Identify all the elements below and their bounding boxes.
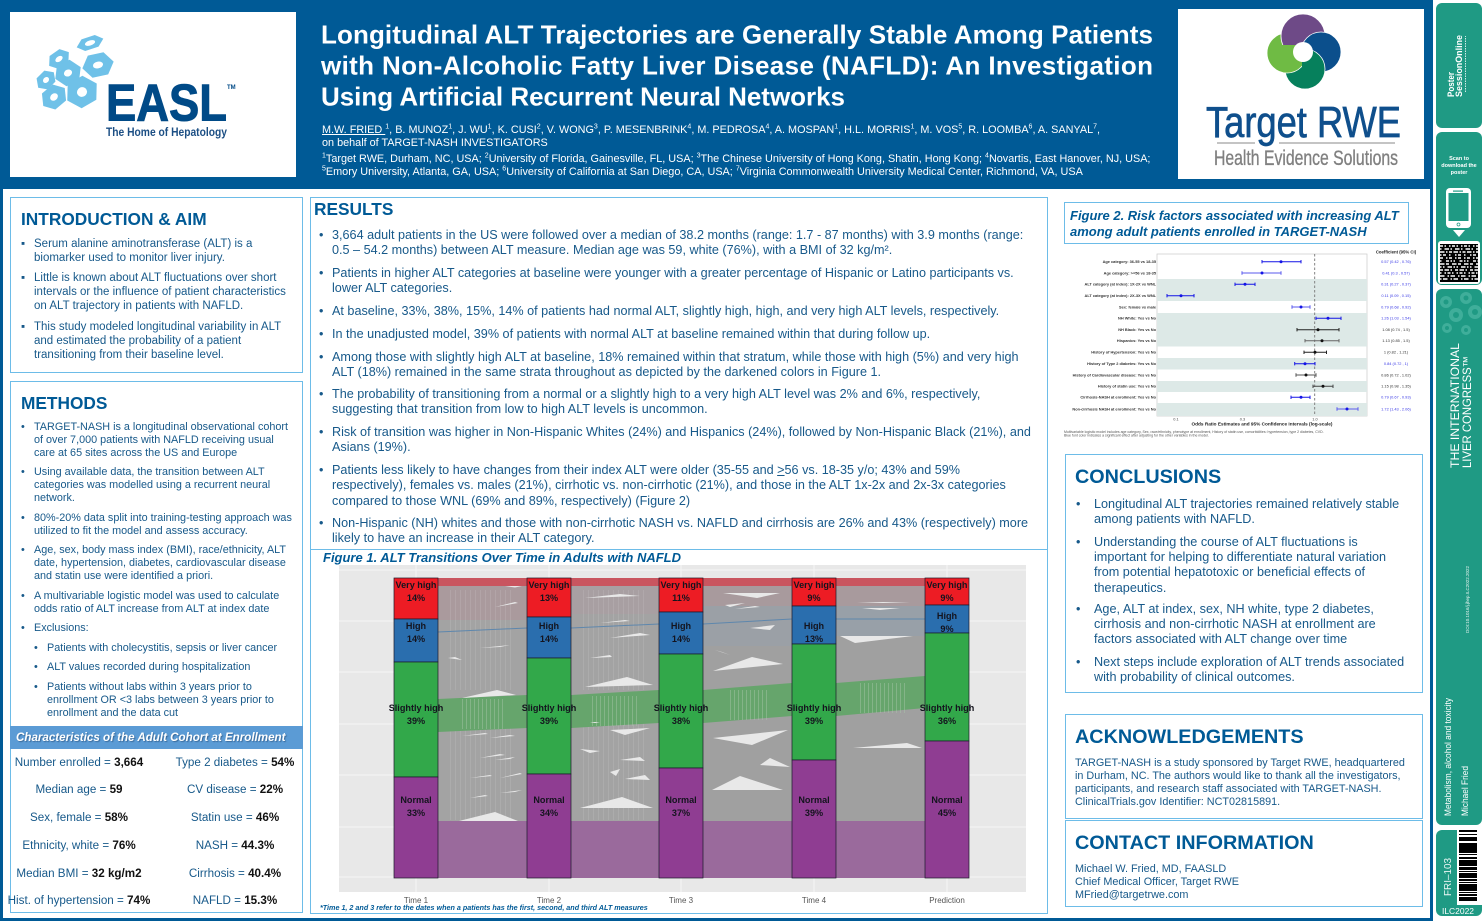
row labels: ALT category (at index): 1X-2X vs WNL bbox=[1085, 282, 1157, 287]
panel: contact information bbox=[1065, 820, 1423, 907]
coefficient column: 1.26 (1.03 , 1.54) bbox=[1381, 316, 1412, 321]
x axis labels bbox=[404, 896, 965, 905]
methods bullets: odds ratio of ALT increase from ALT at index date bbox=[34, 602, 269, 614]
contact text: MFried@targetrwe.com bbox=[1075, 888, 1188, 900]
acknowledgements text: TARGET-NASH is a study sponsored by Target RWE, headquartered bbox=[1075, 756, 1405, 768]
bar labels: Slightly high bbox=[522, 703, 576, 713]
intro bullets: and estimated the probability of a patient bbox=[34, 335, 241, 347]
x axis labels: Time 3 bbox=[669, 896, 694, 905]
coefficient column: 0.57 (0.42 , 0.76) bbox=[1381, 259, 1412, 264]
characteristics table: Median BMI = 32 kg/m2 bbox=[16, 867, 142, 880]
bar labels: High bbox=[671, 621, 691, 631]
x axis labels: Time 2 bbox=[537, 896, 562, 905]
x axis labels: Time 1 bbox=[404, 896, 429, 905]
title bbox=[321, 20, 1153, 112]
conclusions bullets: Longitudinal ALT trajectories remained relatively stable bbox=[1094, 497, 1399, 511]
bar labels: High bbox=[937, 611, 957, 621]
contact text: Chief Medical Officer, Target RWE bbox=[1075, 876, 1239, 888]
intro bullets: on ALT trajectory in patients with NAFLD. bbox=[34, 300, 243, 312]
heading: acknowledgements: ACKNOWLEDGEMENTS bbox=[1075, 726, 1304, 748]
methods bullets: TARGET-NASH is a longitudinal observational cohort bbox=[34, 420, 288, 432]
bar labels: Slightly high bbox=[920, 703, 974, 713]
characteristics table: Statin use = 46% bbox=[191, 811, 279, 824]
contact text: Michael W. Fried, MD, FAASLD bbox=[1075, 862, 1226, 874]
figure 1 footnote: *Time 1, 2 and 3 refer to the dates when a patients has the first, second, and third ALT measures bbox=[320, 903, 648, 912]
figure 2 title: among adult patients enrolled in TARGET-NASH bbox=[1070, 224, 1367, 239]
acknowledgements text: in Durham, NC. The authors would like to thank all the investigators, bbox=[1075, 770, 1401, 782]
results bullets: • bbox=[319, 326, 323, 340]
intro bullets: ▪ bbox=[21, 272, 25, 284]
results bullets: • bbox=[319, 266, 323, 280]
results bullets: Among those with slightly high ALT at baseline, 18% remained within that stratum, while those with high (5%) and very high bbox=[332, 350, 1019, 364]
heading: introduction: INTRODUCTION & AIM bbox=[21, 209, 207, 229]
bar labels: Very high bbox=[529, 580, 569, 590]
affiliations: 1Target RWE, Durham, NC, USA; 2University of Florida, Gainesville, FL, USA; 3The Chinese University of Hong Kong, Shatin, Hong Kong; 4Novartis, East Hanover, NJ, USA; bbox=[322, 152, 1150, 165]
results bullets: • bbox=[319, 350, 323, 364]
coefficient column: 0.79 (0.68 , 0.92) bbox=[1381, 304, 1412, 309]
logo: EASL: The Home of Hepatology bbox=[106, 125, 227, 139]
results bullets: • bbox=[319, 228, 323, 242]
bar labels: 33% bbox=[407, 808, 425, 818]
conclusions bullets: • bbox=[1076, 602, 1080, 616]
axis: 0.1 bbox=[1173, 416, 1179, 422]
bar labels bbox=[389, 580, 974, 818]
congress panel: LIVER CONGRESS™ bbox=[1462, 356, 1474, 468]
results bullets: Non-Hispanic (NH) whites and those with non-cirrhotic NASH vs. NAFLD and cirrhosis are 26% and 43% (respectively) more bbox=[332, 516, 1028, 530]
row labels: Cirrhosis-NASH at enrollment: Yes vs No bbox=[1080, 395, 1157, 400]
characteristics table bbox=[8, 756, 294, 907]
intro bullets: intervals or the influence of patient characteristics bbox=[34, 286, 286, 298]
coefficient column: 0.84 (0.72 , 1) bbox=[1384, 361, 1409, 366]
characteristics table: NASH = 44.3% bbox=[196, 839, 274, 852]
chart: forest plot of odds ratios: Multivariable logistic model includes age category, Sex, race/ethnicity, phenotype at enrollment, History of statin use, comorbidities: hypertension, type 2 diabetes, CVD. bbox=[1064, 430, 1324, 434]
authors: on behalf of TARGET-NASH INVESTIGATORS bbox=[322, 137, 548, 149]
characteristics table: Sex, female = 58% bbox=[30, 811, 128, 824]
coefficient column: 1.13 (0.85 , 1.5) bbox=[1382, 338, 1410, 343]
bar labels: Very high bbox=[396, 580, 436, 590]
methods bullets: enrollment and the data cut bbox=[47, 706, 178, 718]
bar labels: 14% bbox=[672, 634, 690, 644]
results bullets: 0.5 – 54.2 months) between ALT measure. Median age was 59, white (76%), with a BMI of 32 kg/m². bbox=[332, 243, 892, 257]
logo: EASL bbox=[10, 12, 296, 177]
results bullets: Patients in higher ALT categories at baseline were younger with a greater percentage of Hispanic or Latino participants vs. bbox=[332, 266, 1014, 280]
abstract ID and barcode panel: FRI–103 bbox=[1442, 858, 1454, 896]
results bullets: Risk of transition was higher in Non-Hispanic Whites (24%) and Hispanics (24%), followed by Non-Hispanic Black (21%), and bbox=[332, 424, 1031, 438]
heading: results: RESULTS bbox=[314, 199, 393, 219]
axis: 0.3 bbox=[1240, 416, 1245, 422]
characteristics table: Number enrolled = 3,664 bbox=[15, 756, 143, 769]
methods bullets: • bbox=[21, 622, 25, 634]
contact text bbox=[1075, 862, 1239, 900]
results bullets: The probability of transitioning from a normal or a slightly high to a very high ALT level was 2% and 6%, respectively, bbox=[332, 386, 980, 400]
confidence intervals bbox=[1167, 260, 1358, 411]
axis bbox=[1173, 416, 1319, 422]
conclusions bullets: • bbox=[1076, 655, 1080, 669]
coefficient column: 0.11 (0.09 , 0.15) bbox=[1381, 293, 1411, 298]
methods bullets: of over 7,000 patients with NAFLD receiving usual bbox=[34, 434, 274, 446]
intro bullets: transitioning from their baseline level. bbox=[34, 349, 224, 361]
results bullets: In the unadjusted model, 39% of patients with normal ALT at baseline remained within that during follow up. bbox=[332, 326, 930, 340]
bar labels: 34% bbox=[540, 808, 558, 818]
methods bullets: A multivariable logistic model was used to calculate bbox=[34, 590, 279, 602]
methods bullets: • bbox=[21, 544, 25, 556]
characteristics heading bbox=[10, 726, 303, 749]
bar labels: Slightly high bbox=[389, 703, 443, 713]
row labels: Age category: >=56 vs 18-35 bbox=[1104, 270, 1157, 275]
bar labels: 9% bbox=[807, 593, 821, 603]
results bullets: • bbox=[319, 304, 323, 318]
coefficient column bbox=[1376, 250, 1417, 411]
bar labels: Slightly high bbox=[654, 703, 708, 713]
coefficient column: Coefficient (95% CI) bbox=[1376, 250, 1417, 254]
characteristics table: NAFLD = 15.3% bbox=[193, 894, 277, 907]
heading: contact: CONTACT INFORMATION bbox=[1075, 832, 1314, 854]
chart: forest plot of odds ratios: Odds Ratio Estimates and 95% Confidence intervals (log-scale) bbox=[1192, 422, 1333, 426]
logo: EASL: EASL bbox=[106, 74, 227, 132]
bar labels: High bbox=[539, 621, 559, 631]
panel: introduction and aim bbox=[10, 197, 303, 373]
conclusions bullets: among patients with NAFLD. bbox=[1094, 512, 1255, 526]
bar labels: 13% bbox=[540, 593, 558, 603]
characteristics table: Median age = 59 bbox=[35, 783, 123, 796]
bar labels: 11% bbox=[672, 593, 690, 603]
flow gaps bbox=[448, 586, 922, 821]
intro bullets: ▪ bbox=[21, 321, 25, 333]
characteristics table: Cirrhosis = 40.4% bbox=[189, 867, 281, 880]
bar labels: High bbox=[406, 621, 426, 631]
congress panel: Michael Fried bbox=[1460, 766, 1471, 816]
bar labels: High bbox=[804, 621, 824, 631]
bar labels: 36% bbox=[938, 716, 956, 726]
results bullets: Asians (19%). bbox=[332, 440, 411, 454]
conclusions bullets: important for helping to differentiate natural variation bbox=[1094, 550, 1386, 564]
intro bullets: Serum alanine aminotransferase (ALT) is a bbox=[34, 238, 252, 250]
authors bbox=[322, 123, 1100, 149]
icon: arrow down bbox=[1453, 230, 1465, 237]
methods bullets: date, hypertension, diabetes, cardiovascular disease bbox=[34, 556, 286, 568]
results bullets: likely to have an increase in their ALT category. bbox=[332, 531, 594, 545]
coefficient column: 0.86 (0.72 , 1.02) bbox=[1381, 372, 1412, 377]
methods bullets: utilized to fit the model and assess accuracy. bbox=[34, 524, 248, 536]
row labels: History of Cardiovascular disease: Yes vs No bbox=[1073, 372, 1157, 377]
axis: 1.0 bbox=[1312, 416, 1319, 422]
bar labels: 37% bbox=[672, 808, 690, 818]
body frame bbox=[0, 188, 1433, 921]
panel: figure 1 bbox=[310, 549, 1048, 914]
methods bullets: Patients with cholecystitis, sepsis or liver cancer bbox=[47, 642, 277, 654]
logo: Target RWE bbox=[1178, 9, 1424, 179]
acknowledgements text bbox=[1075, 756, 1405, 808]
sidebar: conference strip bbox=[1436, 3, 1482, 916]
QR code bbox=[1438, 241, 1480, 284]
intro bullets: ▪ bbox=[21, 238, 25, 250]
coefficient column: 0.41 (0.3 , 0.57) bbox=[1382, 270, 1410, 275]
scan to download panel: Scan to bbox=[1449, 156, 1470, 162]
heading: methods: METHODS bbox=[21, 393, 107, 413]
characteristics table: Type 2 diabetes = 54% bbox=[176, 756, 294, 769]
conclusions bullets: from potential hepatotoxic or beneficial effects of bbox=[1094, 565, 1365, 579]
conclusions bullets: Understanding the course of ALT fluctuations is bbox=[1094, 535, 1358, 549]
bar labels: 38% bbox=[672, 716, 690, 726]
row labels: NH Black: Yes vs No bbox=[1118, 327, 1157, 332]
results bullets: 3,664 adult patients in the US were followed over a median of 38.2 months (range: 1.7 - 87 months) with 3.9 months (range: bbox=[332, 228, 1023, 242]
methods bullets: • bbox=[21, 512, 25, 524]
poster session online panel: Poster bbox=[1446, 72, 1456, 97]
row labels: Sex: female vs male bbox=[1119, 304, 1157, 309]
methods bullets: • bbox=[21, 466, 25, 478]
results bullets: suggesting that transition from low to high ALT levels is uncommon. bbox=[332, 402, 708, 416]
congress panel: Metabolism, alcohol and toxicity bbox=[1443, 698, 1454, 816]
bar labels: 39% bbox=[805, 808, 823, 818]
bar labels: Slightly high bbox=[787, 703, 841, 713]
methods bullets: • bbox=[21, 420, 25, 432]
results bullets: At baseline, 33%, 38%, 15%, 14% of patients had normal ALT, slightly high, high, and very high ALT levels, respectively. bbox=[332, 304, 999, 318]
congress panel: DOI:10.1016/j.jhep.ILC2022.2022 bbox=[1465, 565, 1470, 633]
results bullets: lower ALT categories. bbox=[332, 281, 452, 295]
stacked bars bbox=[394, 578, 969, 878]
coefficient column: 1.08 (0.74 , 1.5) bbox=[1382, 327, 1410, 332]
results bullets: compared to those WNL (69% and 89%, respectively) (Figure 2) bbox=[332, 494, 690, 508]
x axis labels: Prediction bbox=[929, 896, 965, 905]
results bullets: • bbox=[319, 386, 323, 400]
row labels: Non-cirrhosis NASH at enrollment: Yes vs No bbox=[1072, 406, 1157, 411]
poster session online panel: SessionOnline bbox=[1454, 35, 1464, 97]
methods bullets: and statin use were identified a priori. bbox=[34, 570, 213, 582]
bar labels: Normal bbox=[533, 795, 565, 805]
bar labels: Very high bbox=[927, 580, 967, 590]
conclusions bullets: factors associated with ALT change over time bbox=[1094, 632, 1347, 646]
results bullets: Patients less likely to have changes from their index ALT were older (35-55 and >56 vs. 18-35 y/o; 43% and 59% bbox=[332, 462, 960, 476]
scan to download panel: download the bbox=[1441, 163, 1477, 169]
bar labels: 14% bbox=[540, 634, 558, 644]
figure 2 title: Figure 2. Risk factors associated with increasing ALT bbox=[1070, 208, 1399, 223]
header band bbox=[0, 0, 1433, 188]
authors: M.W. FRIED 1, B. MUNOZ1, J. WU1, K. CUSI2, V. WONG3, P. MESENBRINK4, M. PEDROSA4, A. MOSPAN1, H.L. MORRIS1, M. VOS5, R. LOOMBA6, A. SANYAL7, bbox=[322, 123, 1100, 136]
intro bullets: This study modeled longitudinal variability in ALT bbox=[34, 321, 281, 333]
chart: alluvial ALT transitions bbox=[320, 565, 1026, 912]
methods bullets: ALT values recorded during hospitalization bbox=[47, 660, 250, 672]
logo: EASL: TM bbox=[227, 85, 236, 91]
chart: forest plot of odds ratios bbox=[1064, 250, 1417, 438]
row labels: Age category: 36-55 vs 18-35 bbox=[1103, 259, 1157, 264]
x axis labels: Time 4 bbox=[802, 896, 827, 905]
characteristics table: CV disease = 22% bbox=[187, 783, 283, 796]
chart: forest plot of odds ratios: Blue font color indicates a significant effect after adjusting for the other variables in the model. bbox=[1064, 434, 1209, 438]
body background bbox=[3, 189, 1430, 918]
conclusions bullets: Age, ALT at index, sex, NH white, type 2 diabetes, bbox=[1094, 602, 1374, 616]
bar labels: 9% bbox=[940, 593, 954, 603]
methods bullets bbox=[21, 420, 292, 718]
panel: acknowledgements bbox=[1065, 714, 1423, 819]
bar labels: 9% bbox=[940, 624, 954, 634]
affiliations bbox=[322, 152, 1150, 178]
congress panel bbox=[1436, 289, 1482, 825]
flows bbox=[438, 578, 925, 878]
figure 2 title bbox=[1064, 202, 1409, 244]
abstract ID and barcode panel bbox=[1436, 830, 1482, 916]
bar labels: Normal bbox=[400, 795, 432, 805]
methods bullets: network. bbox=[34, 492, 75, 504]
methods bullets: Exclusions: bbox=[34, 622, 89, 634]
methods bullets: • bbox=[34, 660, 38, 672]
methods bullets: enrollment OR <3 labs between 3 years prior to bbox=[47, 694, 274, 706]
methods bullets: Using available data, the transition between ALT bbox=[34, 466, 265, 478]
conclusions bullets: • bbox=[1076, 535, 1080, 549]
title: Longitudinal ALT Trajectories are Generally Stable Among Patients bbox=[321, 20, 1153, 50]
intro bullets bbox=[21, 238, 286, 361]
bar labels: Normal bbox=[798, 795, 830, 805]
methods bullets: • bbox=[34, 642, 38, 654]
scan to download panel: poster bbox=[1451, 170, 1468, 176]
methods bullets: Patients without labs within 3 years prior to bbox=[47, 680, 252, 692]
results bullets: • bbox=[319, 462, 323, 476]
acknowledgements text: participants, and research staff associated with TARGET-NASH. bbox=[1075, 782, 1382, 794]
bar labels: 14% bbox=[407, 593, 425, 603]
coefficient column: 1.15 (0.98 , 1.35) bbox=[1381, 384, 1412, 389]
coefficient column: 0.31 (0.27 , 0.37) bbox=[1381, 282, 1412, 287]
poster session online panel bbox=[1436, 3, 1482, 128]
bar labels: 39% bbox=[805, 716, 823, 726]
bar labels: Normal bbox=[665, 795, 697, 805]
coefficient column: 0.79 (0.67 , 0.93) bbox=[1381, 395, 1412, 400]
congress panel: THE INTERNATIONAL bbox=[1450, 342, 1462, 468]
bar labels: Very high bbox=[794, 580, 834, 590]
coefficient column: 1.72 (1.43 , 2.06) bbox=[1381, 406, 1412, 411]
row labels: History of Type 2 diabetes: Yes vs No bbox=[1087, 361, 1157, 366]
characteristics table: Hist. of hypertension = 74% bbox=[8, 894, 150, 907]
methods bullets: 80%-20% data split into training-testing approach was bbox=[34, 512, 292, 524]
icon: phone bbox=[1446, 188, 1471, 228]
results bullets: respectively), females vs. males (21%), cirrhotic vs. non-cirrhotic (21%), and those in the ALT 1x-2x and 2x-3x categories bbox=[332, 478, 1006, 492]
affiliations: 5Emory University, Atlanta, GA, USA; 6University of California at San Diego, CA, USA; 7Virginia Commonwealth University Medical Center, Richmond, VA, USA bbox=[322, 165, 1083, 178]
row labels: History of statin use: Yes vs No bbox=[1098, 384, 1157, 389]
row labels: ALT category (at index): 2X-3X vs WNL bbox=[1085, 293, 1157, 298]
results bullets bbox=[319, 228, 1031, 545]
characteristics heading: Characteristics of the Adult Cohort at Enrollment bbox=[16, 731, 285, 744]
row labels: Hispanics: Yes vs No bbox=[1117, 338, 1157, 343]
scan to download panel bbox=[1436, 132, 1482, 285]
intro bullets: Little is known about ALT fluctuations over short bbox=[34, 272, 276, 284]
bar labels: 39% bbox=[540, 716, 558, 726]
intro bullets: biomarker used to monitor liver injury. bbox=[34, 252, 225, 264]
results bullets: ALT (18%) remained in the same strata throughout as depicted by the darkened colors in Figure 1. bbox=[332, 365, 881, 379]
panel: results bbox=[310, 197, 1048, 550]
bar labels: 45% bbox=[938, 808, 956, 818]
conclusions bullets bbox=[1076, 497, 1404, 684]
figure 1 title: Figure 1. ALT Transitions Over Time in Adults with NAFLD bbox=[323, 550, 681, 565]
row labels: History of Hypertension: Yes vs No bbox=[1091, 350, 1157, 355]
abstract ID and barcode panel: ILC2022 bbox=[1442, 906, 1474, 916]
bar labels: 14% bbox=[407, 634, 425, 644]
methods bullets: categories was modelled using a recurrent neural bbox=[34, 478, 270, 490]
methods bullets: care at 65 sites across the US and Europe bbox=[34, 446, 237, 458]
bar labels: 13% bbox=[805, 634, 823, 644]
characteristics table: Ethnicity, white = 76% bbox=[22, 839, 136, 852]
heading: conclusions: CONCLUSIONS bbox=[1075, 466, 1221, 488]
conclusions bullets: • bbox=[1076, 497, 1080, 511]
methods bullets: • bbox=[21, 590, 25, 602]
bar labels: 39% bbox=[407, 716, 425, 726]
conclusions bullets: therapeutics. bbox=[1094, 581, 1166, 595]
panel: conclusions bbox=[1065, 454, 1423, 693]
row labels: NH White: Yes vs No bbox=[1118, 316, 1157, 321]
bar labels: Normal bbox=[931, 795, 963, 805]
title: with Non-Alcoholic Fatty Liver Disease (NAFLD): An Investigation bbox=[321, 50, 1153, 80]
acknowledgements text: ClinicalTrials.gov Identifier: NCT02815891. bbox=[1075, 796, 1280, 808]
panel: methods bbox=[10, 381, 303, 913]
row labels bbox=[1072, 259, 1157, 411]
results bullets: • bbox=[319, 424, 323, 438]
methods bullets: • bbox=[34, 680, 38, 692]
results bullets: • bbox=[319, 516, 323, 530]
coefficient column: 1 (0.82 , 1.21) bbox=[1384, 350, 1409, 355]
conclusions bullets: Next steps include exploration of ALT trends associated bbox=[1094, 655, 1404, 669]
conclusions bullets: with probability of clinical outcomes. bbox=[1094, 670, 1295, 684]
bar labels: Very high bbox=[661, 580, 701, 590]
methods bullets: Age, sex, body mass index (BMI), race/ethnicity, ALT bbox=[34, 544, 286, 556]
conclusions bullets: cirrhosis and non-cirrhotic NASH at enrollment are bbox=[1094, 617, 1376, 631]
title: Using Artificial Recurrent Neural Networks bbox=[321, 82, 845, 112]
